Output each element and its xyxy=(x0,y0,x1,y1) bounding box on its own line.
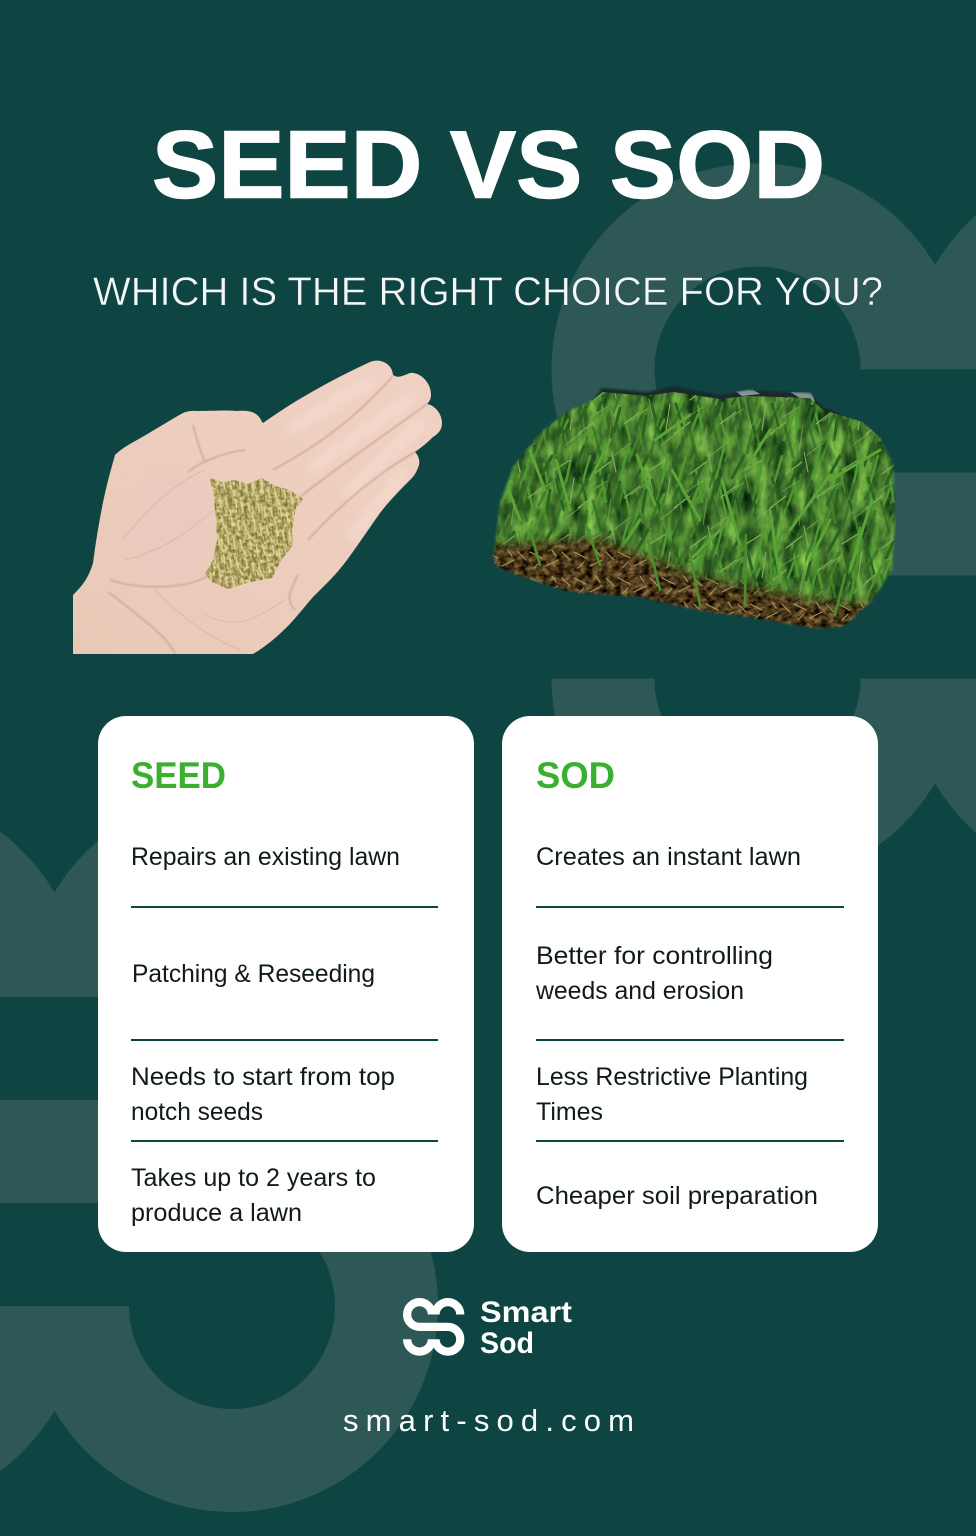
blades overlapping soil xyxy=(530,525,885,615)
dark top edge xyxy=(593,386,842,416)
palm shading xyxy=(118,462,222,598)
icon: logo mark xyxy=(407,1302,460,1352)
background logo pattern: bottom left xyxy=(0,842,387,1460)
long bright blades xyxy=(505,415,880,580)
title: SEED VS SOD xyxy=(152,112,825,218)
item: weeds and erosion: weeds and erosion xyxy=(535,977,744,1005)
item: planting times: Less Restrictive Planting xyxy=(536,1063,808,1091)
panel: seed xyxy=(98,716,474,1252)
item: patching: Patching & Reseeding xyxy=(132,960,375,988)
grass texture xyxy=(494,392,896,610)
item: repairs: Repairs an existing lawn xyxy=(131,843,400,871)
image: patch of sod xyxy=(492,386,896,630)
item: planting times: Times xyxy=(536,1098,603,1126)
finger highlights xyxy=(290,378,425,540)
logo wordmark xyxy=(480,1296,572,1360)
item: planting times xyxy=(536,1063,808,1126)
item: instant lawn: Creates an instant lawn xyxy=(536,843,801,871)
logo wordmark: Sod xyxy=(480,1327,534,1360)
soil band xyxy=(492,532,875,630)
subtitle: WHICH IS THE RIGHT CHOICE FOR YOU? xyxy=(93,270,883,314)
item: takes two years: produce a lawn xyxy=(131,1199,302,1227)
website url: smart-sod.com xyxy=(343,1403,634,1438)
palm and finger creases xyxy=(108,376,427,654)
item: top notch seeds xyxy=(131,1063,395,1126)
panel: sod xyxy=(502,716,878,1252)
item: weeds and erosion xyxy=(535,942,773,1005)
image: hand holding seeds xyxy=(70,355,445,657)
item: top notch seeds: Needs to start from top xyxy=(131,1063,395,1091)
logo wordmark: Smart xyxy=(480,1296,572,1329)
background logo pattern: top right xyxy=(603,215,976,833)
item: soil preparation: Cheaper soil preparation xyxy=(536,1182,818,1210)
logo: smart sod xyxy=(407,1296,572,1360)
item: takes two years: Takes up to 2 years to xyxy=(131,1164,376,1192)
item: top notch seeds: notch seeds xyxy=(131,1098,263,1126)
heading: sod: SOD xyxy=(536,755,615,796)
item: weeds and erosion: Better for controlling xyxy=(536,942,773,970)
heading: seed: SEED xyxy=(131,755,226,796)
seed pile xyxy=(205,478,303,589)
item: takes two years xyxy=(131,1164,376,1227)
